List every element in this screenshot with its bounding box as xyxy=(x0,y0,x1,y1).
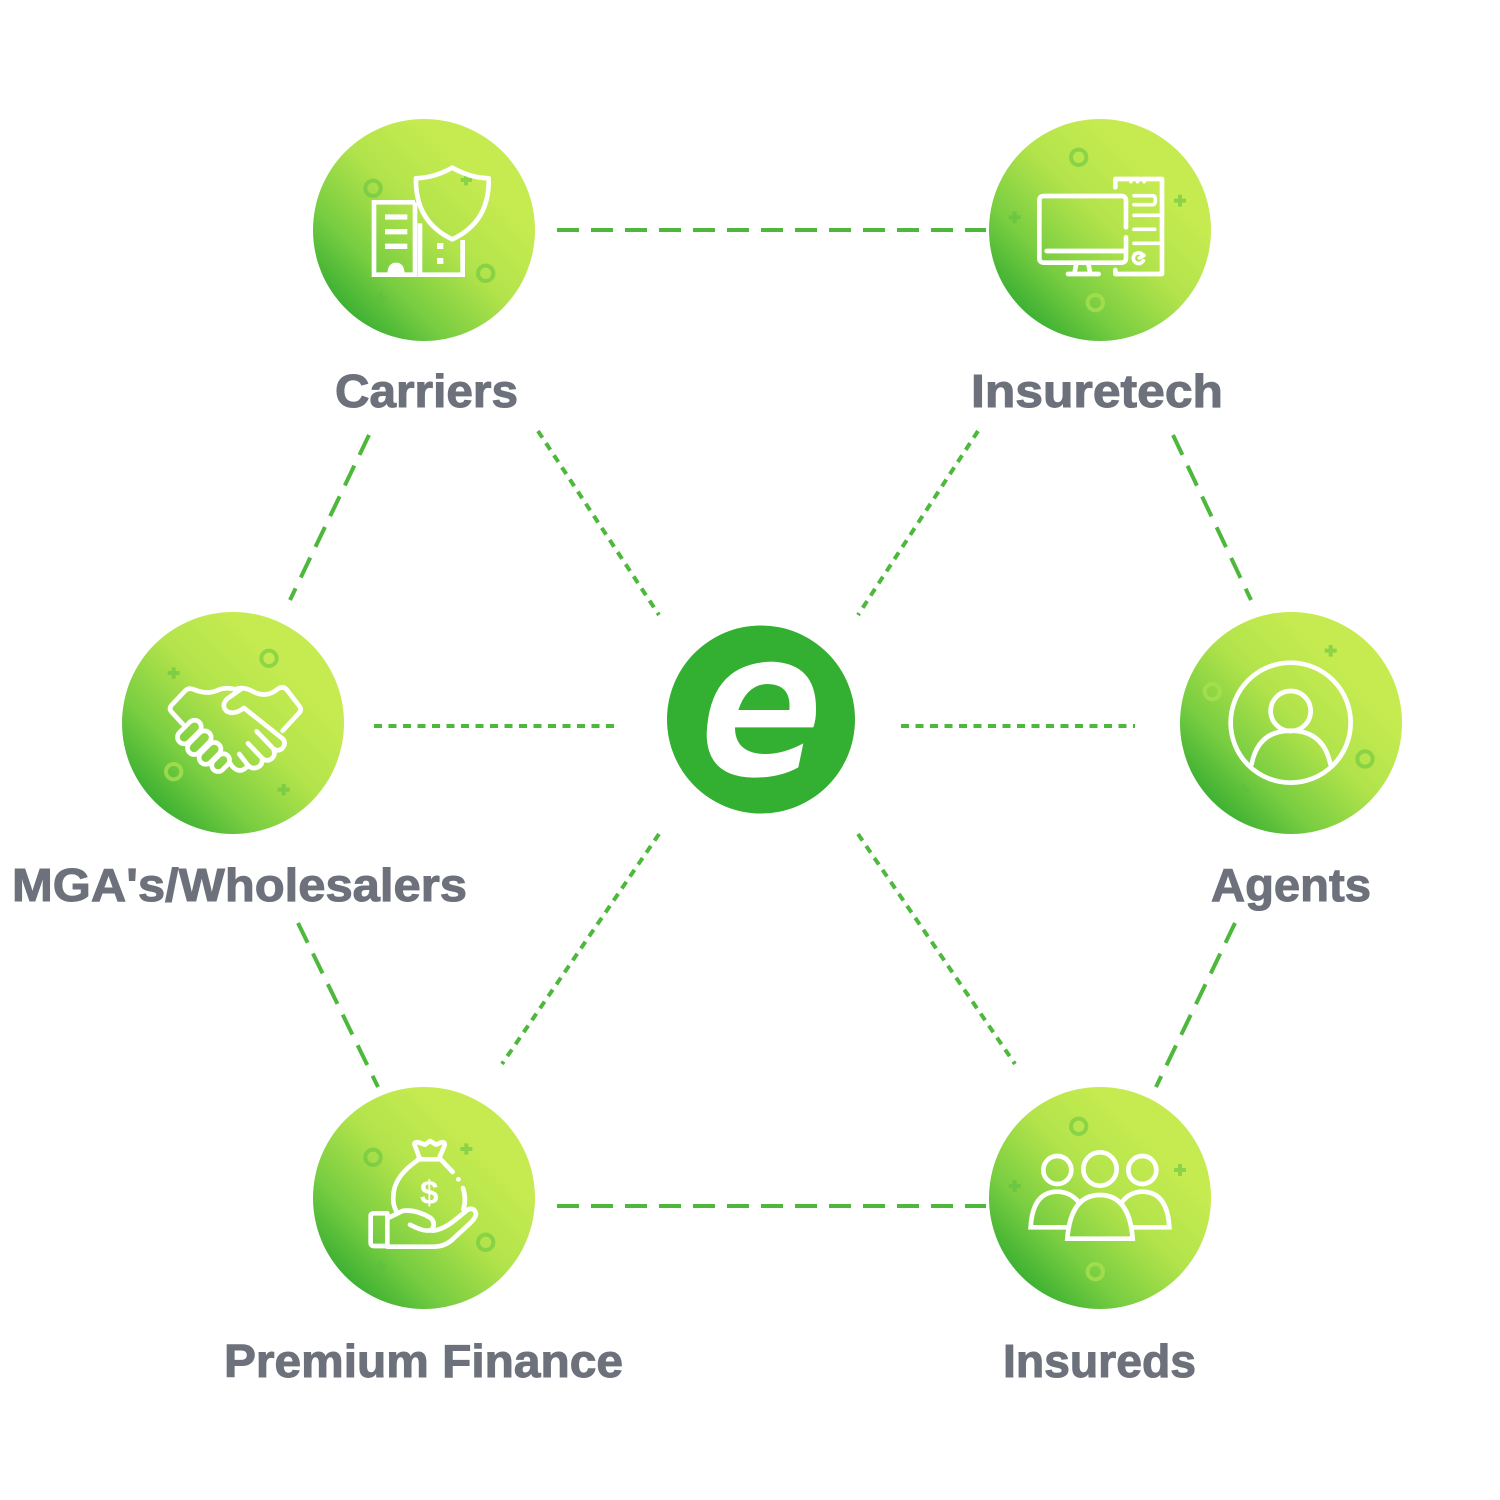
icon: computer xyxy=(1009,150,1186,310)
center logo: e xyxy=(667,626,855,814)
node: Insuretech xyxy=(989,119,1211,341)
node: Carriers xyxy=(313,119,535,341)
node: Agents xyxy=(1180,612,1402,834)
node: MGA's/Wholesalers xyxy=(122,612,344,834)
icon: money bag in hand: $ xyxy=(420,1175,439,1212)
icon: handshake xyxy=(166,651,301,795)
icon: user profile xyxy=(1205,645,1373,796)
label: Premium Finance: Premium Finance xyxy=(224,1335,623,1387)
label: Insuretech: Insuretech xyxy=(971,365,1223,417)
label: Insureds: Insureds xyxy=(1003,1335,1196,1387)
icon: building and shield xyxy=(365,168,493,303)
label: Carriers: Carriers xyxy=(335,365,518,417)
label: MGA's/Wholesalers: MGA's/Wholesalers xyxy=(12,859,467,911)
icon: group of people xyxy=(1009,1119,1186,1279)
icon: money bag in hand xyxy=(365,1141,493,1272)
label: Agents: Agents xyxy=(1211,859,1371,911)
node: Insureds xyxy=(989,1087,1211,1309)
connector lines xyxy=(290,230,1251,1206)
node: Premium Finance xyxy=(313,1087,535,1309)
